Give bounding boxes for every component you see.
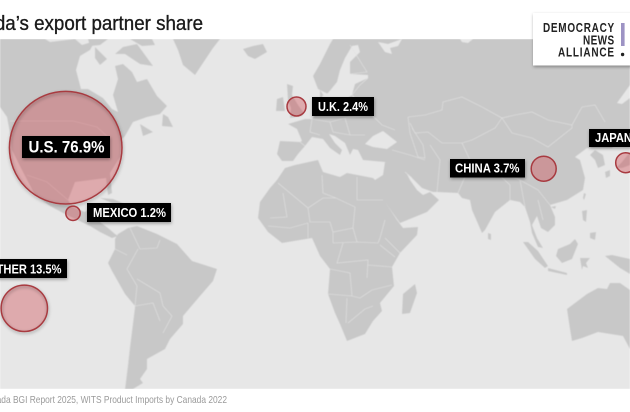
- land: Eurasia: [277, 39, 630, 248]
- land: Korea: [590, 150, 605, 168]
- island: Ellesmere: [130, 39, 155, 46]
- island: Borneo: [556, 239, 578, 263]
- island: Banks: [88, 39, 108, 46]
- sea: Baltic: [322, 45, 368, 103]
- sea: Okhotsk: [617, 85, 630, 104]
- island: Java: [548, 268, 567, 275]
- island: Sri Lanka: [488, 233, 491, 240]
- island: Philippines north: [582, 210, 587, 222]
- land: Africa: [258, 160, 418, 341]
- land: Madagascar: [402, 284, 417, 314]
- label: China: [450, 159, 525, 178]
- island: Philippines south: [590, 232, 596, 240]
- label: Mexico: MEXICO 1.2%: [93, 206, 166, 220]
- sea: Black Sea: [365, 131, 397, 149]
- land: Asia-Pacific islands: [488, 150, 630, 349]
- island: Baffin: [115, 44, 153, 66]
- country borders: [10, 45, 605, 388]
- bubble: China: [531, 156, 556, 181]
- bubble: Japan: [616, 153, 630, 173]
- label: China: CHINA 3.7%: [455, 162, 520, 176]
- island: Ireland: [276, 97, 285, 111]
- island: Nova Scotia: [140, 124, 153, 136]
- island: Hainan: [551, 206, 556, 209]
- land: North America: [0, 39, 167, 238]
- sea: White Sea: [378, 39, 402, 54]
- bubble: U.S.: [9, 91, 122, 204]
- land: Arabia: [375, 162, 439, 223]
- sea: Kara: [460, 39, 473, 43]
- land: Greenland: [173, 39, 220, 75]
- land: British Isles: [276, 84, 304, 118]
- island: Victoria: [95, 47, 107, 65]
- island: Sumatra: [523, 242, 548, 268]
- island: Kyushu: [605, 170, 610, 178]
- label: U.K.: [312, 97, 374, 116]
- land: Australia: [567, 283, 630, 349]
- label: U.K.: U.K. 2.4%: [318, 100, 368, 114]
- island: New Guinea: [605, 255, 630, 274]
- logo: Democracy News Alliance: NEWS: [583, 35, 615, 48]
- island: Great Britain: [287, 84, 304, 118]
- land: Arctic islands: [88, 39, 173, 204]
- water: inland seas: [322, 39, 630, 149]
- island: Taiwan: [583, 193, 586, 200]
- logo: Democracy News Alliance: ALLIANCE: [558, 47, 614, 60]
- logo: Democracy News Alliance: DEMOCRACY: [543, 22, 615, 35]
- bubble: Other: [1, 285, 48, 331]
- island: Honshu: [618, 154, 630, 168]
- label: U.S.: U.S. 76.9%: [28, 138, 105, 157]
- land: South America: [108, 226, 217, 389]
- logo: Democracy News Alliance: [533, 13, 630, 66]
- bubble: Mexico: [66, 206, 80, 220]
- island: Newfoundland: [162, 114, 173, 127]
- island: Cuba: [102, 198, 122, 203]
- label: Japan: [589, 129, 630, 147]
- bubble: U.K.: [287, 97, 306, 116]
- label: Mexico: [87, 203, 171, 222]
- island: Sulawesi: [580, 258, 590, 270]
- land: Iceland: [243, 44, 267, 59]
